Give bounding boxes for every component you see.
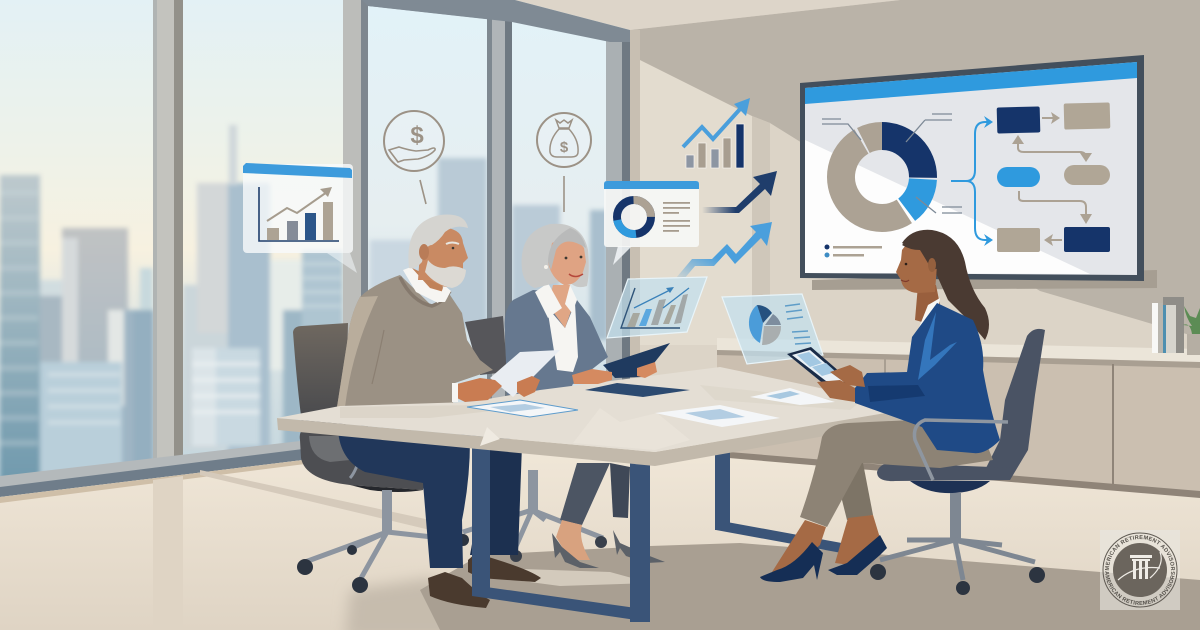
- client man hands and paper: [452, 350, 560, 402]
- arrow: dark growth: [702, 171, 777, 213]
- screen header bar: [805, 62, 1137, 104]
- holographic panel: pie chart: [722, 294, 823, 364]
- chair: advisor: [870, 329, 1045, 595]
- advisor jacket: [855, 303, 1000, 453]
- chair: man: [293, 323, 469, 593]
- credenza: [717, 338, 1200, 498]
- logo lettering: AMERICAN RETIREMENT ADVISORS: [1105, 535, 1175, 570]
- wall screen: [800, 55, 1157, 290]
- advisor hands: [830, 365, 865, 387]
- chair: woman: [463, 316, 607, 562]
- icon: money bag: $: [560, 139, 569, 156]
- person: advisor: [760, 230, 1008, 582]
- logo column emblem: [1118, 552, 1161, 580]
- ceiling: [515, 0, 900, 30]
- floating growth chart: [683, 98, 750, 168]
- advisor tablet: [787, 347, 855, 385]
- table: [277, 367, 915, 466]
- donut chart: [825, 120, 939, 234]
- text lines: [663, 202, 690, 232]
- screen frame: [800, 55, 1144, 281]
- screen legend: [824, 244, 882, 258]
- client woman hands and tablet: [572, 343, 670, 384]
- documents on table: [467, 383, 835, 427]
- logo lettering: AMERICAN RETIREMENT ADVISORS: [1105, 571, 1175, 606]
- client woman face: [548, 239, 586, 285]
- holographic panel: bar chart: [607, 277, 707, 338]
- person: client woman upper body: [505, 224, 608, 395]
- shoes: [468, 553, 541, 582]
- floor reflection of frame: [153, 476, 183, 630]
- icon: hand with dollar: $: [410, 122, 424, 149]
- callout chart axes: [259, 187, 339, 241]
- window frames: [0, 0, 630, 497]
- callout trend arrow: [267, 187, 332, 221]
- client woman hair: [522, 224, 589, 288]
- callout: bar chart: [243, 163, 357, 273]
- callout header: [243, 163, 352, 178]
- mini donut: [616, 199, 652, 235]
- table legs: [472, 445, 858, 622]
- person: client man upper body: [337, 215, 493, 407]
- icon: hand with dollar: [384, 111, 444, 204]
- person: client man lower body: [338, 430, 541, 608]
- books on credenza: [1152, 297, 1184, 353]
- back wall: [515, 0, 1200, 630]
- advisor face: [896, 240, 937, 293]
- arrow: blue growth: [676, 222, 772, 279]
- callout: donut and text lines: [604, 181, 699, 265]
- floor: [0, 428, 1200, 630]
- donut leader lines: [822, 114, 962, 213]
- icon: money bag: [537, 113, 591, 212]
- screen display: [805, 62, 1137, 275]
- callout chart bars: [267, 202, 333, 240]
- flow connectors: [951, 112, 1092, 246]
- plant: [1183, 306, 1200, 355]
- person: client woman lower body: [552, 463, 665, 568]
- advisor neck and shirt: [915, 285, 940, 322]
- callout header: [604, 181, 699, 189]
- advisor hair back: [902, 230, 989, 340]
- advisor legs: [760, 420, 993, 582]
- advisor chair armrest: [914, 420, 1008, 480]
- flow nodes: [997, 102, 1110, 252]
- window view: city skyline: [0, 0, 640, 500]
